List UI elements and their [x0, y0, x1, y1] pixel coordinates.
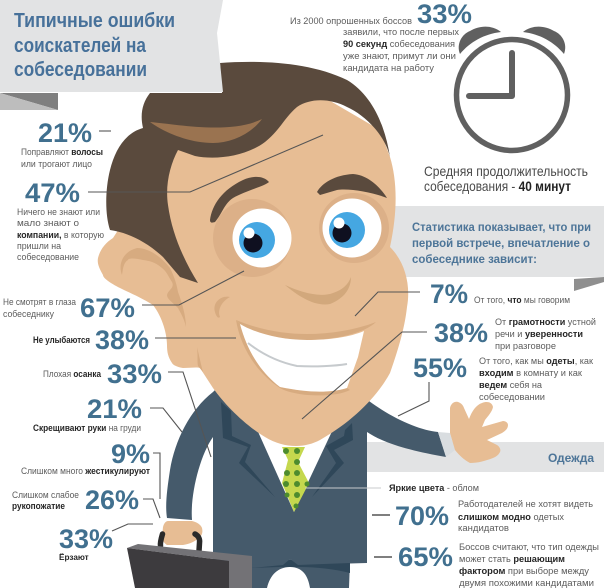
stat: clothing as deciding factor 65%: может стать решающим: [459, 554, 565, 565]
stat: 90 seconds 33%: уже знают, примут ли они: [343, 51, 456, 62]
legs: [251, 560, 350, 588]
nose: [285, 277, 351, 305]
title panel: соискателей на: [14, 35, 147, 57]
stat: no smile 38%: 38%: [95, 325, 149, 355]
stat: know nothing about company 47%: пришли на: [17, 241, 62, 252]
stat: crossed arms 21%: Скрещивают руки на груди: [33, 423, 141, 434]
stat: appearance and behaviour 55%: [413, 353, 594, 403]
stat: appearance and behaviour 55%: 55%: [413, 353, 467, 383]
title panel: собеседовании: [14, 59, 147, 81]
stat: crossed arms 21%: 21%: [87, 394, 142, 424]
title panel: [0, 0, 223, 110]
stat: weak handshake 26%: 26%: [85, 485, 139, 515]
hair highlight: [150, 119, 262, 143]
leader lines: [88, 131, 429, 557]
heading: first impression statistics: [412, 220, 591, 266]
text: average interview duration: собеседования - 40 минут: [424, 178, 571, 194]
stat: too fashionable 70%: слишком модно одетых: [458, 512, 564, 523]
stat: know nothing about company 47%: [17, 178, 104, 263]
stat: know nothing about company 47%: 47%: [25, 178, 80, 208]
earlobe crease: [197, 347, 203, 372]
text: average interview duration: [424, 163, 588, 194]
stat: know nothing about company 47%: мало знают о: [17, 218, 79, 229]
stat: gesticulate 9%: Слишком много жестикулируют: [21, 466, 150, 477]
stat: what we say 7%: От того, что мы говорим: [474, 295, 570, 306]
stat: what we say 7%: [430, 279, 570, 309]
mouth: [240, 324, 364, 392]
stat: no eye contact 67%: 67%: [80, 293, 135, 323]
stat: clothing as deciding factor 65%: фактором при выборе между: [459, 566, 589, 577]
stat: bad posture 33%: Плохая осанка: [43, 369, 102, 380]
stat: appearance and behaviour 55%: ведем себя на: [479, 380, 543, 391]
stat: clothing as deciding factor 65%: Боссов считают, что тип одежды: [459, 542, 599, 553]
stat: 90 seconds 33%: кандидата на работу: [343, 63, 434, 74]
panel: statistics band background: [380, 206, 604, 277]
ribbon: statistics band fold: [574, 277, 604, 291]
stat: 90 seconds 33%: [290, 0, 472, 74]
stat: appearance and behaviour 55%: собеседовании: [479, 392, 545, 403]
stat: fidget 33%: Ёрзают: [59, 552, 89, 562]
stat: bad posture 33%: [43, 359, 162, 389]
stat: gesticulate 9%: [21, 439, 150, 477]
left hand: [162, 521, 202, 545]
stat: hair touching 21%: или трогают лицо: [21, 159, 92, 170]
stat: no eye contact 67%: Не смотрят в глаза: [3, 297, 77, 308]
briefcase: [127, 534, 252, 588]
stat: 90 seconds 33%: Из 2000 опрошенных боссов: [290, 16, 412, 27]
stat: know nothing about company 47%: собеседование: [17, 252, 79, 263]
stat: 90 seconds 33%: 90 секунд собеседования: [343, 39, 455, 50]
ear crease: [121, 248, 186, 327]
stat: weak handshake 26%: рукопожатие: [12, 501, 65, 512]
heading: first impression statistics: Статистика показывает, что при: [412, 220, 591, 234]
stat: no eye contact 67%: собеседнику: [3, 309, 54, 320]
stat: hair touching 21%: Поправляют волосы: [21, 147, 103, 158]
stat: appearance and behaviour 55%: От того, как мы одеты, как: [479, 356, 594, 367]
stat: no smile 38%: Не улыбаются: [33, 335, 90, 346]
stat: weak handshake 26%: Слишком слабое: [12, 490, 79, 501]
stat: know nothing about company 47%: Ничего не знают или: [17, 207, 100, 218]
stat: too fashionable 70%: кандидатов: [458, 523, 509, 534]
hair: [106, 62, 390, 283]
stat: clothing as deciding factor 65%: [398, 542, 599, 588]
eyebrows: [210, 174, 387, 223]
tie: [282, 447, 310, 512]
stat: too fashionable 70%: 70%: [395, 501, 449, 531]
stat: fidget 33%: 33%: [59, 524, 113, 554]
stat: bad posture 33%: 33%: [107, 359, 162, 389]
heading: first impression statistics: собеседнике зависит:: [412, 252, 537, 266]
lapels: [221, 402, 353, 497]
stat: appearance and behaviour 55%: входим в комнату и как: [479, 368, 583, 379]
lower lip: [236, 320, 350, 395]
stat: too fashionable 70%: Работодателей не хотят видеть: [458, 499, 593, 510]
stat: too fashionable 70%: [395, 499, 593, 534]
stat: what we say 7%: 7%: [430, 279, 468, 309]
stat: speech competence 38%: 38%: [434, 318, 488, 348]
stat: weak handshake 26%: [12, 485, 139, 515]
stat: 90 seconds 33%: заявили, что после первых: [343, 27, 459, 38]
panel: clothing band background: [366, 442, 604, 472]
stat: crossed arms 21%: [33, 394, 142, 434]
illustration: businessman: [98, 62, 508, 588]
upper lip: [236, 320, 376, 340]
teeth line: [248, 343, 347, 366]
stat: gesticulate 9%: 9%: [111, 439, 150, 469]
stat: clothing as deciding factor 65%: 65%: [398, 542, 453, 572]
eye: left: [213, 199, 292, 277]
title panel: Типичные ошибки: [14, 10, 175, 32]
waving hand: [450, 402, 508, 463]
shirt: [255, 425, 335, 512]
heading: first impression statistics: первой встрече, впечатление о: [412, 236, 590, 250]
heading: clothing: Одежда: [548, 451, 594, 465]
suit jacket and arms: [166, 380, 446, 565]
stat: know nothing about company 47%: компании, в которую: [17, 230, 104, 241]
stat: speech competence 38%: при разговоре: [495, 341, 556, 352]
stat: speech competence 38%: речи и уверенности: [495, 329, 583, 340]
head and neck skin: [98, 95, 408, 446]
icon: alarm clock: [456, 27, 568, 151]
shirt cuff: [438, 432, 455, 457]
eye: right: [319, 193, 389, 263]
stat: no smile 38%: [33, 325, 149, 355]
stat: no eye contact 67%: [3, 293, 135, 323]
text: bright colours: Яркие цвета - облом: [389, 483, 479, 494]
waist shadow: [251, 559, 350, 573]
cheek crease: [214, 297, 230, 318]
stat: speech competence 38%: От грамотности устной: [495, 317, 596, 328]
stat: speech competence 38%: [434, 317, 596, 352]
stat: hair touching 21%: [21, 118, 103, 170]
stat: hair touching 21%: 21%: [38, 118, 92, 148]
